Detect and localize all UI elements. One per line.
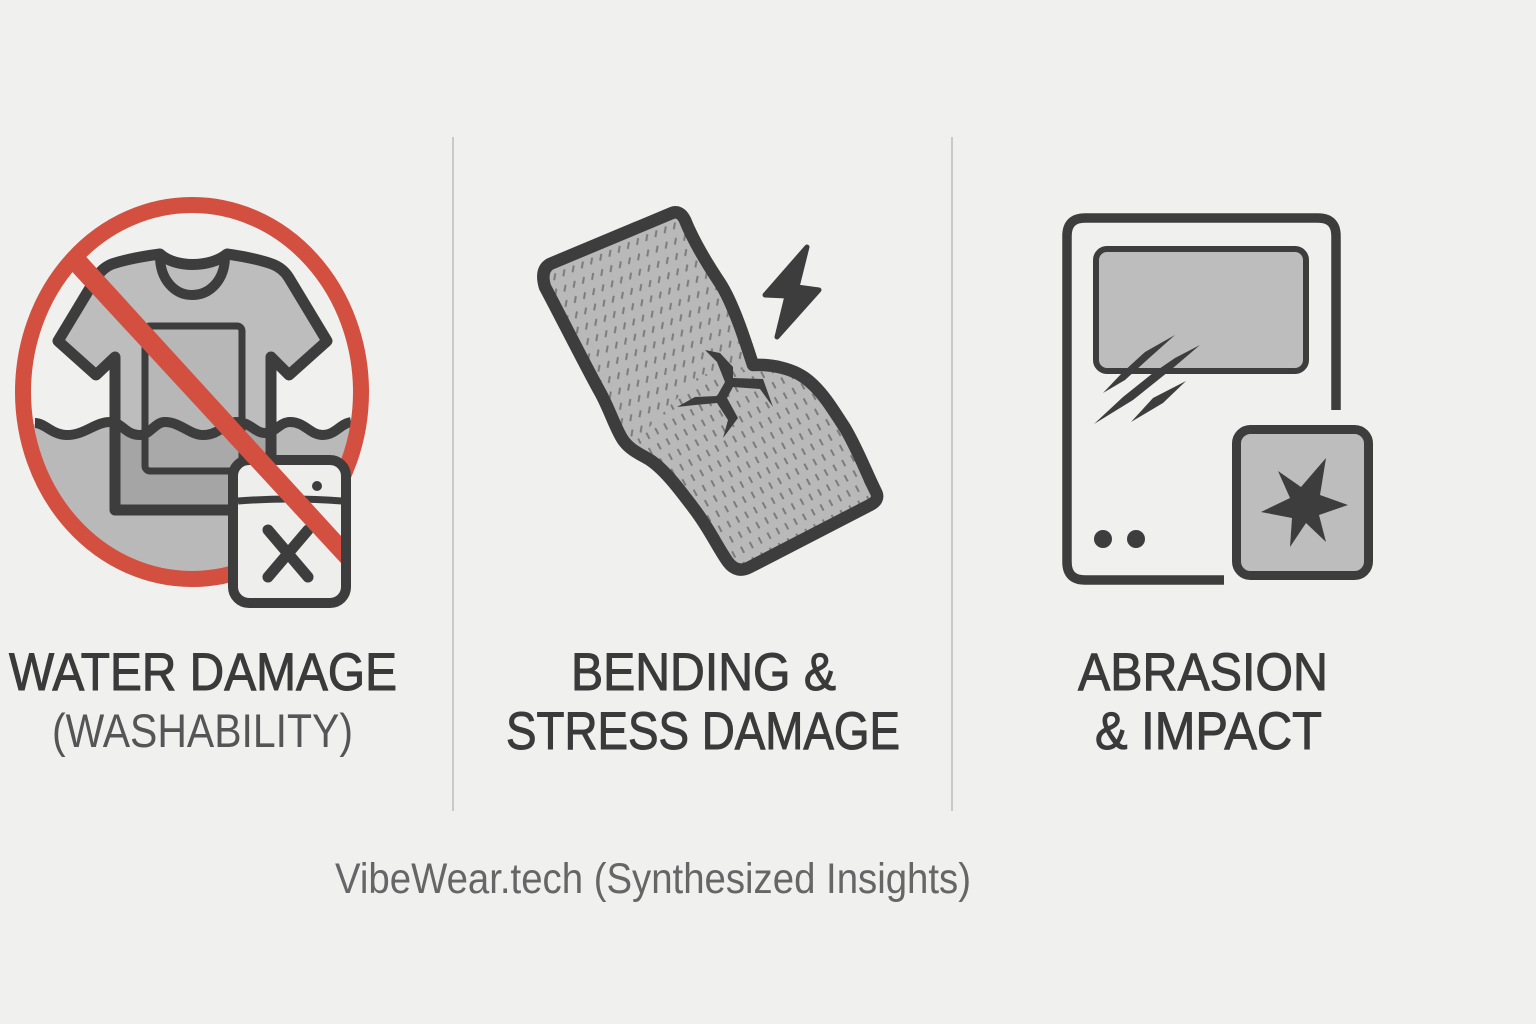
washing machine icon	[233, 460, 346, 603]
screen	[1096, 249, 1306, 371]
scratches	[1094, 335, 1200, 424]
water fill inside circle	[34, 424, 350, 571]
icon: water damage no-wash symbol	[20, 205, 370, 603]
fabric weave dashes	[553, 222, 870, 563]
heading: abrasion and impact: ABRASION	[1078, 643, 1328, 702]
indicator dots	[1094, 530, 1145, 548]
icon: scratched device with impact mark	[1067, 218, 1368, 580]
impact star	[1261, 458, 1348, 547]
heading: water damage	[9, 643, 397, 757]
heading: abrasion and impact	[1078, 643, 1328, 761]
icon: t-shirt	[58, 254, 327, 510]
icon: bent fabric with crack	[537, 206, 884, 576]
source credit: VibeWear.tech (Synthesized Insights)	[335, 855, 971, 903]
water wave line	[35, 422, 351, 435]
device frame	[1067, 218, 1336, 580]
impact panel	[1236, 430, 1368, 576]
heading: bending and stress damage	[506, 643, 900, 761]
heading: abrasion and impact: & IMPACT	[1095, 702, 1322, 761]
prohibition ring	[23, 205, 361, 579]
heading: water damage: WATER DAMAGE	[9, 643, 397, 702]
fabric outline	[543, 212, 877, 570]
heading: bending and stress damage: STRESS DAMAGE	[506, 702, 900, 761]
crack	[677, 350, 773, 438]
heading: bending and stress damage: BENDING &	[571, 643, 836, 702]
lightning bolt	[765, 247, 819, 337]
prohibition slash	[65, 249, 341, 563]
heading: water damage: (WASHABILITY)	[52, 704, 353, 757]
